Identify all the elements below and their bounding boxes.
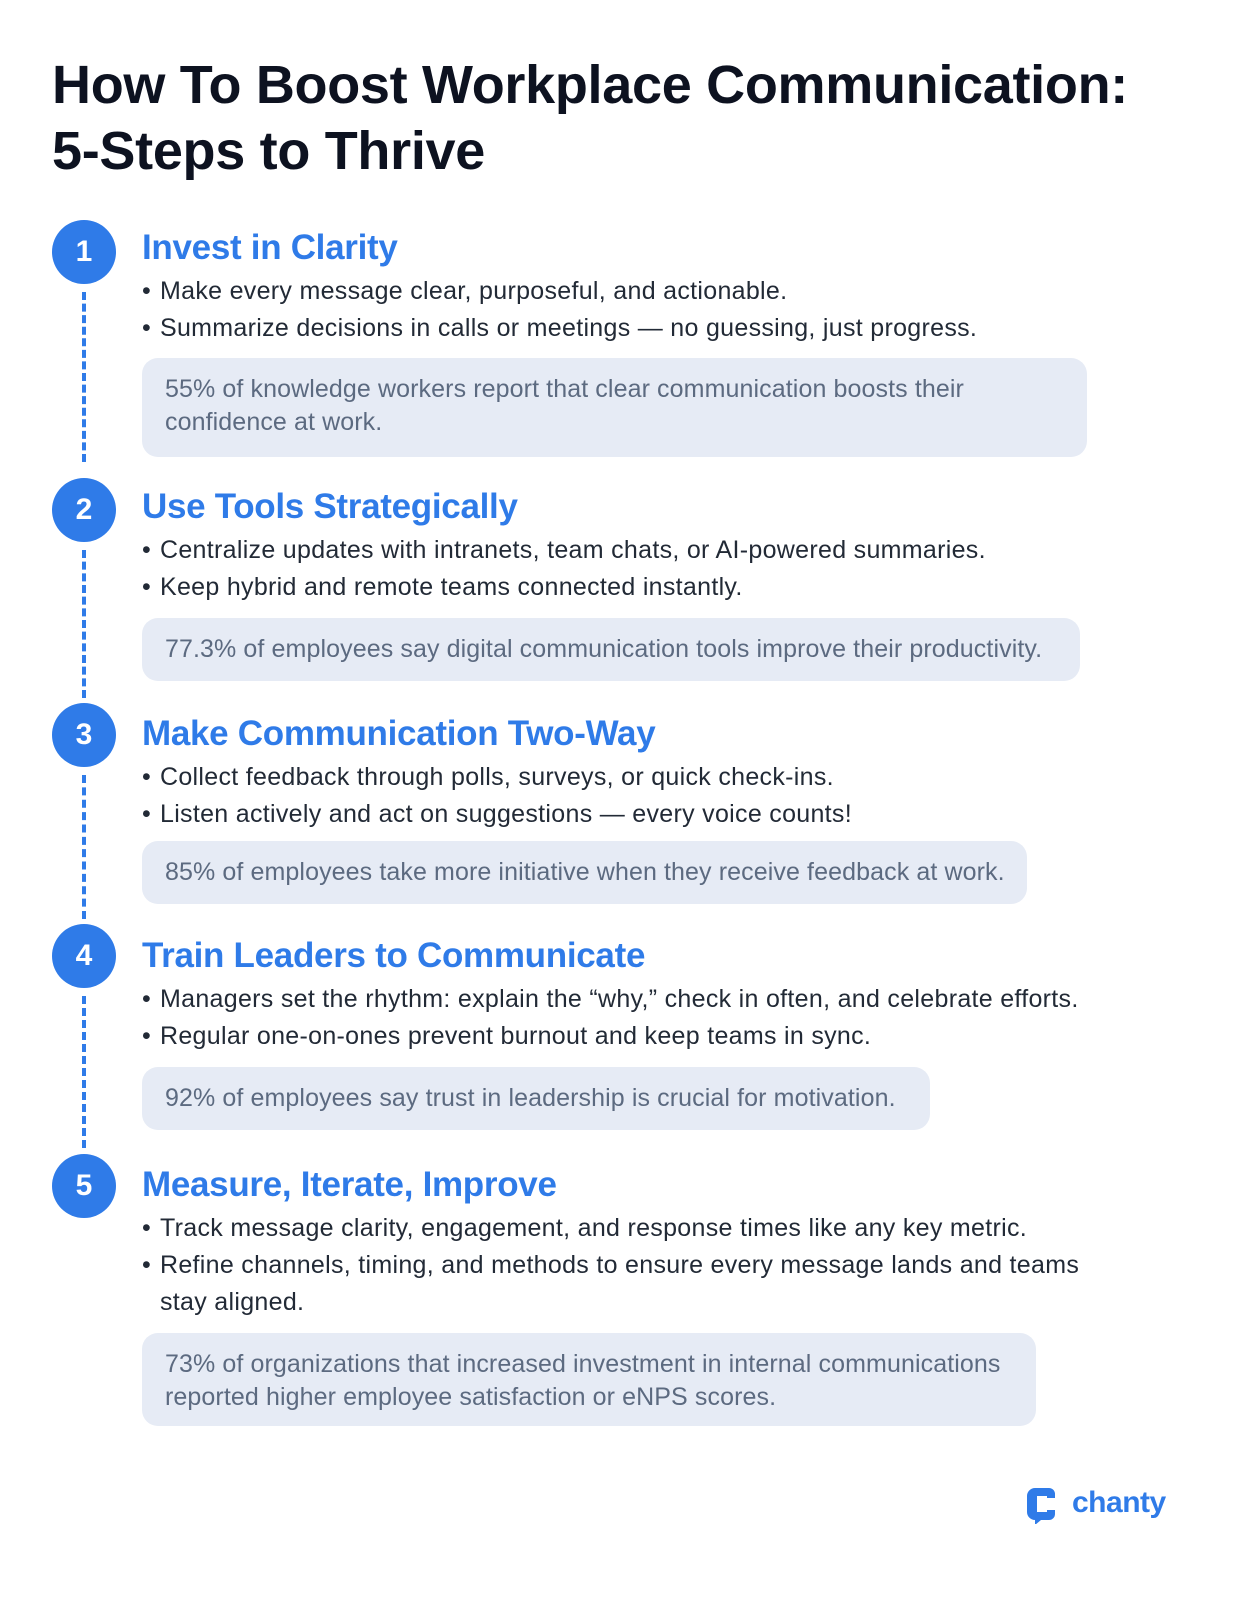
step 5 stat callout: reported higher employee satisfaction or eNPS scores.	[165, 1383, 776, 1411]
step 4 bullets	[143, 985, 1079, 1050]
step 2 stat callout: 77.3% of employees say digital communication tools improve their productivity.	[165, 635, 1042, 663]
step 1 bullets: Summarize decisions in calls or meetings — no guessing, just progress.	[160, 314, 977, 342]
step 2 bullets	[143, 536, 986, 601]
step 2	[52, 478, 1080, 681]
timeline connector 1	[82, 292, 86, 462]
icon: chat bubble	[1027, 1488, 1055, 1524]
step 4 number: 4	[76, 939, 92, 972]
step 5 bullets: Refine channels, timing, and methods to ensure every message lands and teams stay aligned.	[160, 1251, 1079, 1316]
step 2 stat callout	[142, 618, 1080, 681]
step 1 number: 1	[76, 235, 92, 268]
logo text: chanty	[1072, 1486, 1166, 1519]
step 2 number: 2	[76, 493, 92, 526]
step 3 heading: Make Communication Two-Way	[142, 714, 655, 753]
step 1 stat callout	[142, 358, 1087, 457]
step 4 heading: Train Leaders to Communicate	[142, 936, 645, 975]
step 3 number: 3	[76, 718, 92, 751]
step 2 number	[52, 478, 116, 542]
step 5 stat callout	[142, 1333, 1036, 1426]
step 4 stat callout	[142, 1067, 930, 1130]
title: How To Boost Workplace Communication:	[52, 55, 1128, 115]
step 5	[52, 1154, 1079, 1426]
step 4 bullets: Managers set the rhythm: explain the “why,” check in often, and celebrate efforts.	[160, 985, 1079, 1013]
step 5 number	[52, 1154, 116, 1218]
step 1 stat callout: confidence at work.	[165, 408, 382, 436]
step 1	[52, 220, 1087, 457]
step 2 bullets: Keep hybrid and remote teams connected instantly.	[160, 573, 743, 601]
step 2 bullets: Centralize updates with intranets, team chats, or AI-powered summaries.	[160, 536, 986, 564]
title: 5-Steps to Thrive	[52, 121, 485, 181]
step 3 bullets	[143, 763, 852, 828]
step 4 number	[52, 924, 116, 988]
step 2 heading: Use Tools Strategically	[142, 487, 518, 526]
step 1 number	[52, 220, 116, 284]
step 3 number	[52, 703, 116, 767]
step 1 bullets: Make every message clear, purposeful, and actionable.	[160, 277, 787, 305]
step 5 number: 5	[76, 1169, 92, 1202]
logo: chanty	[1027, 1486, 1166, 1524]
step 3 bullets: Collect feedback through polls, surveys, or quick check-ins.	[160, 763, 834, 791]
step 4 stat callout: 92% of employees say trust in leadership is crucial for motivation.	[165, 1084, 896, 1112]
step 3 stat callout	[142, 841, 1027, 904]
step 4 bullets: Regular one-on-ones prevent burnout and keep teams in sync.	[160, 1022, 871, 1050]
step 3 bullets: Listen actively and act on suggestions — every voice counts!	[160, 800, 852, 828]
step 1 heading: Invest in Clarity	[142, 228, 398, 267]
step 5 stat callout: 73% of organizations that increased investment in internal communications	[165, 1350, 1001, 1378]
step 5 bullets: Track message clarity, engagement, and response times like any key metric.	[160, 1214, 1027, 1242]
step 3	[52, 703, 1027, 904]
timeline connector 3	[82, 775, 86, 919]
timeline connector 4	[82, 996, 86, 1148]
step 5 bullets	[143, 1214, 1079, 1316]
step 1 stat callout: 55% of knowledge workers report that clear communication boosts their	[165, 375, 964, 403]
timeline connector 2	[82, 550, 86, 698]
title	[52, 55, 1128, 181]
step 3 stat callout: 85% of employees take more initiative when they receive feedback at work.	[165, 858, 1005, 886]
step 5 heading: Measure, Iterate, Improve	[142, 1165, 557, 1204]
step 1 bullets	[143, 277, 977, 342]
step 4	[52, 924, 1079, 1130]
